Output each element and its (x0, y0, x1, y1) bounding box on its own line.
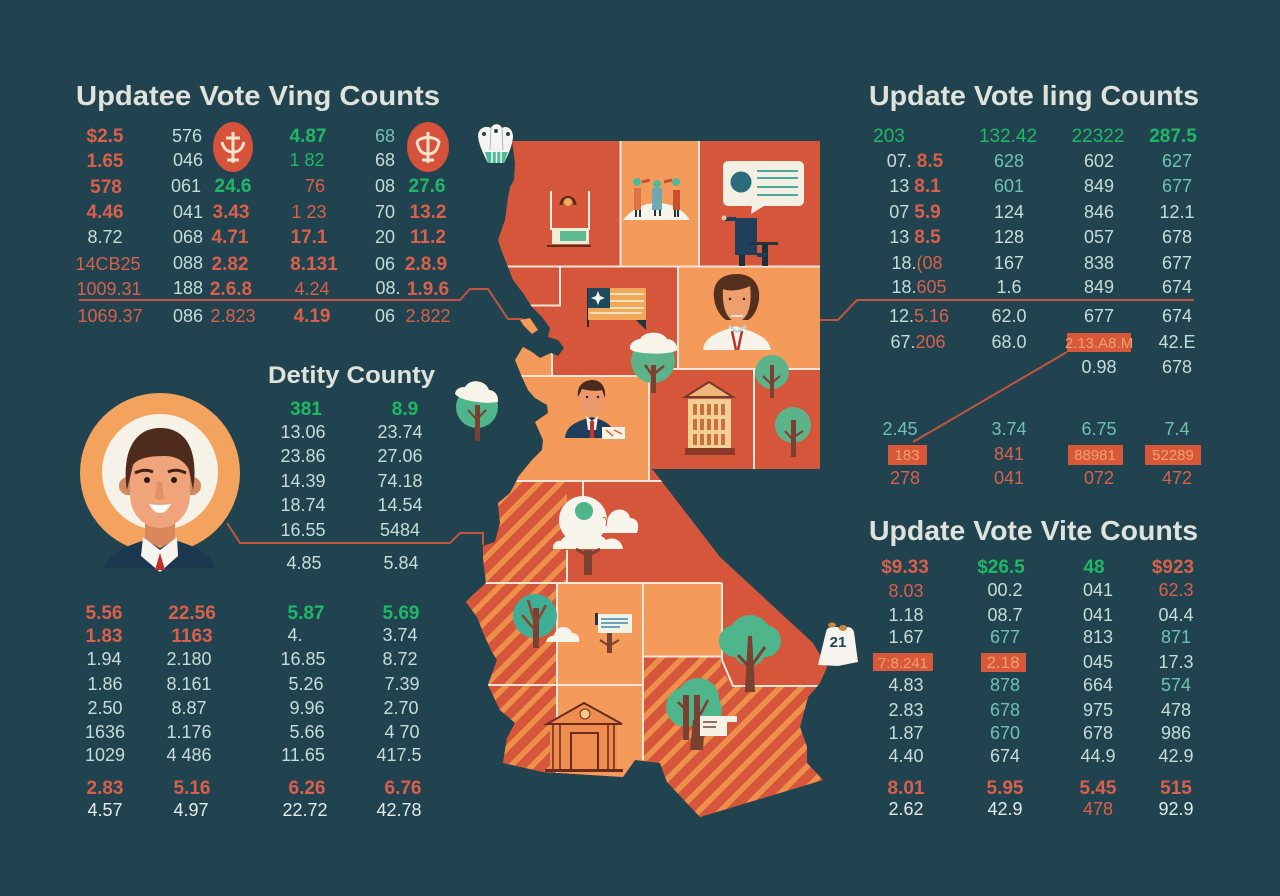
heading: Detity County (268, 362, 436, 389)
panel: bottom-left values: 5.69 (383, 603, 419, 624)
panel: bottom-left values: 4.57 (87, 800, 123, 820)
table: bottom-right values: 7:8.241 (878, 655, 928, 672)
panel: bottom-left values: 2.50 (87, 698, 123, 718)
table: bottom-right values: $9.33 (881, 557, 929, 578)
table: county values: 14.54 (377, 495, 423, 515)
table: top-right values: 472 (1162, 468, 1192, 488)
table: top-right values: 2.13.A8.M (1065, 335, 1133, 352)
table: top-right values: 278 (890, 468, 920, 488)
table: bottom-right values: 041 (1083, 605, 1113, 625)
panel: bottom-left values: 1.83 (86, 626, 122, 647)
table: top-left values: 188 (173, 278, 203, 298)
icon: building with columns (685, 382, 735, 455)
table: bottom-right values: 478 (1161, 700, 1191, 720)
table: bottom-right values: 1.87 (888, 723, 924, 743)
table: top-right values: 22322 (1072, 126, 1124, 147)
table: top-right values: 678 (1162, 357, 1192, 377)
table: county values: 14.39 (280, 471, 326, 491)
table: top-right values: 627 (1162, 151, 1192, 171)
icon: emblem badge 1 (213, 122, 253, 172)
table: county values (280, 399, 423, 573)
panel: bottom-left values: 4 70 (384, 722, 420, 742)
panel: bottom-left values: 3.74 (382, 625, 418, 645)
table: bottom-right values: 42.9 (987, 799, 1023, 819)
table: top-right values: 602 (1084, 151, 1114, 171)
table: top-left values: 578 (90, 177, 122, 198)
table: top-left values: 8.131 (290, 254, 338, 275)
table: top-right values: 057 (1084, 227, 1114, 247)
panel: bottom-left values: 1029 (85, 745, 125, 765)
panel: portrait of candidate (80, 393, 240, 572)
table: top-left values: 1069.37 (77, 306, 143, 326)
table: bottom-right values: 48 (1083, 557, 1105, 578)
icon: east ballot bags: 21 (830, 634, 846, 651)
panel: bottom-left values: 22.72 (282, 800, 328, 820)
panel: bottom-left values: 1.94 (86, 649, 122, 669)
table: top-left values: 1.65 (87, 151, 124, 172)
icon: flag with speech tail (587, 288, 646, 330)
table: bottom-right values: 42.9 (1158, 746, 1194, 766)
table: top-left values: 2.6.8 (210, 279, 252, 300)
panel: bottom-left values: 2.180 (166, 649, 212, 669)
table: top-right values: 124 (994, 202, 1024, 222)
table: top-right values: 42.E (1158, 332, 1196, 352)
highlight boxes (888, 333, 1201, 465)
table: top-left values: 4.19 (294, 306, 330, 327)
highlight boxes (873, 653, 1026, 672)
panel: bottom-left values: 5.87 (288, 603, 324, 624)
table: bottom-right values (878, 557, 1194, 819)
table: county values: 381 (290, 399, 322, 420)
panel: bottom-left values: 16.85 (280, 649, 326, 669)
icon: top white marker (478, 124, 513, 163)
panel: bottom-left values: 5.16 (174, 778, 210, 799)
icon: person in suit with map (565, 380, 625, 439)
panel: bottom-left values (85, 603, 422, 820)
panel: bottom-left values: 4.97 (173, 800, 209, 820)
panel: detity county (268, 362, 436, 573)
table: bottom-right values: 2.62 (888, 799, 924, 819)
table: bottom-right values: 677 (990, 627, 1020, 647)
tree: small lower right (775, 407, 811, 457)
table: top-right values: 183 (894, 447, 920, 464)
table: top-left values: 20 (375, 227, 395, 247)
icon: voting machine (547, 191, 591, 247)
table: top-left values: 1 82 (289, 150, 325, 170)
table: top-right values: 132.42 (979, 126, 1037, 147)
table: county values: 74.18 (377, 471, 423, 491)
panel: bottom-left values: 1163 (171, 626, 213, 647)
table: bottom-right values: 4.40 (888, 746, 924, 766)
table: top-right values: 68.0 (991, 332, 1027, 352)
panel: bottom-left values: 4 486 (166, 745, 212, 765)
table: top-left values: 4.87 (290, 126, 326, 147)
table: top-right values: 12.5.16 (889, 306, 949, 326)
table: bottom-right values: 2.18 (986, 653, 1020, 672)
table: top-left values: 576 (172, 126, 202, 146)
icon: small cloud (546, 627, 579, 642)
table: top-left values: 68 (375, 150, 395, 170)
table: top-right values: 7.4 (1164, 419, 1190, 439)
table: bottom-right values: 4.83 (888, 675, 924, 695)
table: bottom-right values: 04.4 (1158, 605, 1194, 625)
table: top-right values: 3.74 (991, 419, 1027, 439)
panel: bottom-left values: 5.26 (288, 674, 324, 694)
table: bottom-right values: 674 (990, 746, 1020, 766)
table: top-left values: 2.823 (210, 306, 256, 326)
heading: Update Vote ling Counts (869, 80, 1199, 111)
table: county values: 5484 (380, 520, 420, 540)
table: bottom-right values: 17.3 (1158, 652, 1194, 672)
panel: bottom-left values: 1636 (85, 722, 125, 742)
table: bottom-right values: 1.18 (888, 605, 924, 625)
table: top-left values: 4.46 (87, 202, 123, 223)
table: top-right values: 12.1 (1159, 202, 1195, 222)
table: bottom-right values: 2.83 (888, 700, 924, 720)
table: top-right values: 52289 (1152, 447, 1194, 464)
table: top-right values: 18.605 (891, 277, 947, 297)
icon: notice sign on stand (595, 613, 632, 653)
table: top-left values: 11.2 (410, 227, 446, 248)
table: top-left values: 1.9.6 (407, 279, 449, 300)
table: bottom-right values: 08.7 (987, 605, 1023, 625)
table: top-right values: 674 (1162, 306, 1192, 326)
table: bottom-right values: 574 (1161, 675, 1191, 695)
table: top-right values: 849 (1084, 176, 1114, 196)
panel: bottom-left values: 42.78 (376, 800, 422, 820)
table: top-left values: 041 (173, 202, 203, 222)
table: top-right values: 677 (1084, 306, 1114, 326)
table: top-left values: 08 (375, 176, 395, 196)
table: bottom-right values: 678 (1083, 723, 1113, 743)
table: bottom-right values: 878 (990, 675, 1020, 695)
table: top-right values: 677 (1162, 176, 1192, 196)
table: county values: 23.74 (377, 422, 423, 442)
table: top-right values: 18.(08 (891, 253, 943, 273)
table: county values: 18.74 (280, 495, 326, 515)
table: top-left values: 8.72 (87, 227, 123, 247)
table: top-left values: 3.43 (213, 202, 249, 223)
panel: top-right vote counts (869, 80, 1201, 488)
table: bottom-right values: 664 (1083, 675, 1113, 695)
table: top-left values: 70 (375, 202, 395, 222)
tree: snow-capped centre (630, 333, 677, 393)
table: bottom-right values: 975 (1083, 700, 1113, 720)
table: bottom-right values: 041 (1083, 580, 1113, 600)
table: top-right values: 849 (1084, 277, 1114, 297)
connector: right table to map (820, 300, 1194, 320)
table: bottom-right values: 515 (1160, 778, 1192, 799)
panel: bottom-left values: 1.176 (166, 722, 212, 742)
panel: bottom-left values: 8.87 (171, 698, 207, 718)
map: state divided into counties (460, 130, 840, 830)
panel: bottom-left values: 6.26 (289, 778, 325, 799)
tree: small upper right (755, 355, 789, 398)
table: bottom-right values: $923 (1152, 557, 1194, 578)
table: top-left values: 2.8.9 (405, 254, 447, 275)
table: bottom-right values: 5.95 (987, 778, 1024, 799)
table: top-left values: 27.6 (409, 176, 445, 197)
table: top-right values: 841 (994, 444, 1024, 464)
table: top-left values: 046 (173, 150, 203, 170)
table: top-right values: 287.5 (1149, 126, 1197, 147)
table: top-left values: 1 23 (291, 202, 327, 222)
panel: bottom-left values: 8.161 (166, 674, 212, 694)
table: bottom-right values: 62.3 (1158, 580, 1194, 600)
panel: bottom-left values: 9.96 (289, 698, 325, 718)
table: bottom-right values: $26.5 (977, 557, 1025, 578)
panel: bottom-left values: 5.56 (86, 603, 122, 624)
table: county values: 13.06 (280, 422, 326, 442)
panel: bottom-right vote counts (869, 515, 1198, 819)
panel: bottom-left values: 6.76 (385, 778, 421, 799)
icon: cloud with balloon and tree (553, 496, 638, 575)
icon: courthouse (545, 703, 623, 772)
icon: person in white shirt (703, 274, 771, 350)
table: top-right values: 2.45 (882, 419, 918, 439)
table: top-left values: 2.82 (212, 254, 248, 275)
table: top-right values: 128 (994, 227, 1024, 247)
table: top-left values: 06 (375, 306, 395, 326)
panel: bottom-left values: 1.86 (87, 674, 123, 694)
tree: big right (719, 615, 781, 690)
map blob at connector end (520, 318, 538, 334)
table: top-right values: 07. 8.5 (887, 151, 944, 172)
panel: bottom-left values: 11.65 (281, 745, 325, 765)
table: top-right values: 674 (1162, 277, 1192, 297)
table: top-left values: 08. (375, 278, 401, 298)
connector: highlighted values (913, 352, 1067, 442)
heading: Update Vote Vite Counts (869, 515, 1198, 546)
table: county values: 23.86 (280, 446, 326, 466)
table: bottom-right values: 8.03 (888, 581, 924, 601)
table: bottom-right values: 478 (1083, 799, 1113, 819)
table: top-right values: 628 (994, 151, 1024, 171)
table: bottom-right values: 871 (1161, 627, 1191, 647)
tree: left hatch county (513, 594, 557, 648)
tree: off-coast snow-capped (455, 381, 498, 441)
table: top-right values: 677 (1162, 253, 1192, 273)
table: top-right values: 07 5.9 (889, 202, 941, 223)
icon: speaker with speech bubble (722, 161, 804, 266)
table: top-right values: 601 (994, 176, 1024, 196)
table: top-left values: 088 (173, 253, 203, 273)
table: top-left values: 06 (375, 254, 395, 274)
table: top-right values: 1.6 (996, 277, 1022, 297)
table: top-left values: 13.2 (410, 202, 446, 223)
table: top-right values: 041 (994, 468, 1024, 488)
table: top-right values: 62.0 (991, 306, 1027, 326)
panel: top-left vote counts (75, 80, 451, 327)
table: top-left values: 4.24 (294, 279, 330, 299)
table: top-right values: 203 (873, 126, 905, 147)
table: top-right values: 13 8.5 (889, 227, 941, 248)
connector: left table to map (79, 289, 523, 319)
table: top-right values: 88981 (1074, 447, 1116, 464)
table: top-left values: 24.6 (215, 176, 251, 197)
panel: bottom-left values: 2.70 (383, 698, 419, 718)
table: county values: 8.9 (392, 399, 418, 420)
table: top-left values: 17.1 (291, 227, 328, 248)
table: bottom-right values: 1.67 (888, 627, 924, 647)
table: top-right values: 67.206 (890, 332, 946, 352)
table: bottom-right values: 00.2 (987, 580, 1023, 600)
table: top-right values (873, 126, 1197, 488)
panel: bottom-left values: 8.72 (382, 649, 418, 669)
table: top-right values: 678 (1162, 227, 1192, 247)
panel: bottom-left values: 417.5 (376, 745, 422, 765)
icon: group of people (623, 178, 690, 220)
table: top-left values: 68 (375, 126, 395, 146)
table: top-right values: 838 (1084, 253, 1114, 273)
table: bottom-right values: 8.01 (888, 778, 925, 799)
panel: bottom-left values: 4. (287, 625, 303, 645)
table: top-left values: 14CB25 (75, 254, 141, 274)
table: top-right values: 6.75 (1081, 419, 1117, 439)
panel: bottom-left values: 22.56 (168, 603, 216, 624)
table: bottom-right values: 045 (1083, 652, 1113, 672)
table: top-left values: 068 (173, 227, 203, 247)
table: top-right values: 072 (1084, 468, 1114, 488)
table: top-right values: 0.98 (1081, 357, 1117, 377)
table: bottom-right values: 92.9 (1158, 799, 1194, 819)
table: top-left values: 086 (173, 306, 203, 326)
table: county values: 16.55 (280, 520, 326, 540)
table: bottom-right values: 5.45 (1080, 778, 1117, 799)
heading: Updatee Vote Ving Counts (76, 80, 440, 111)
table: top-left values: 4.71 (212, 227, 249, 248)
panel: bottom-left values: 2.83 (87, 778, 123, 799)
table: bottom-right values: 670 (990, 723, 1020, 743)
tree with placard (666, 678, 737, 750)
table: top-left values (75, 126, 451, 327)
panel: bottom-left values: 7.39 (384, 674, 420, 694)
table: top-right values: 13 8.1 (889, 176, 941, 197)
table: county values: 5.84 (383, 553, 419, 573)
table: county values: 27.06 (377, 446, 423, 466)
connector: portrait to map (227, 523, 483, 545)
table: county values: 4.85 (286, 553, 322, 573)
panel: bottom-left values: 5.66 (289, 722, 325, 742)
table: top-right values: 167 (994, 253, 1024, 273)
table: top-left values: $2.5 (87, 126, 124, 147)
table: top-left values: 2.822 (405, 306, 451, 326)
table: bottom-right values: 44.9 (1080, 746, 1116, 766)
table: bottom-right values: 678 (990, 700, 1020, 720)
icon: emblem badge 2 (407, 122, 449, 172)
table: bottom-right values: 986 (1161, 723, 1191, 743)
table: top-left values: 061 (171, 176, 201, 196)
table: top-left values: 76 (305, 176, 325, 196)
table: top-right values: 846 (1084, 202, 1114, 222)
table: top-left values: 1009.31 (76, 279, 142, 299)
icon: east ballot bags (818, 622, 858, 666)
table: bottom-right values: 813 (1083, 627, 1113, 647)
